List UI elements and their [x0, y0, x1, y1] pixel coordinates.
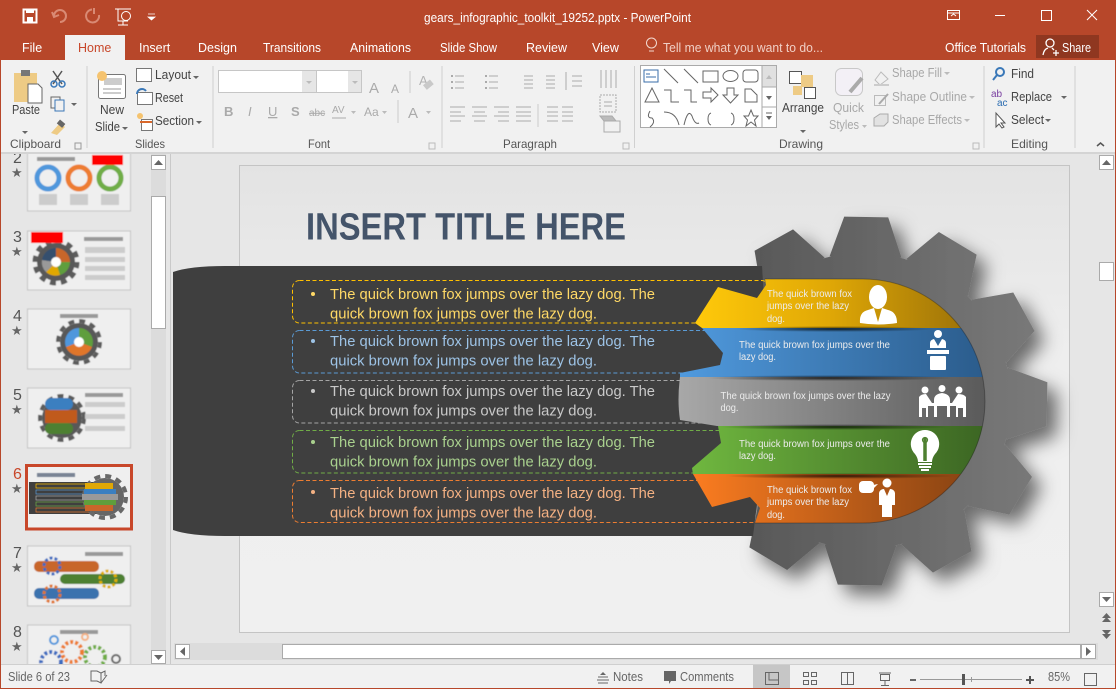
band: grey: The quick brown fox jumps over the lazy	[720, 391, 890, 402]
band: blue: The quick brown fox jumps over the	[739, 340, 890, 351]
title bar	[0, 0, 1116, 60]
group: shape format buttons: Shape Outline	[892, 90, 967, 104]
text box: yellow item: The quick brown fox jumps over the lazy dog. The	[330, 286, 655, 303]
group: font: abc	[309, 108, 325, 119]
text box: blue item: The quick brown fox jumps over the lazy dog. The	[330, 333, 655, 350]
ribbon tabs: Home	[78, 41, 111, 55]
slide numbers: 7	[13, 545, 22, 562]
group: font: S	[291, 104, 300, 119]
group: arrange	[782, 72, 824, 133]
band: green	[692, 424, 983, 474]
slide numbers: ★	[11, 560, 23, 575]
group: editing: Select	[1011, 113, 1044, 127]
ribbon tabs: Slide Show	[440, 41, 498, 55]
slide numbers: ★	[11, 402, 23, 417]
band: orange: The quick brown fox	[767, 485, 852, 496]
group: drawing shape gallery	[640, 65, 776, 128]
group: clipboard	[10, 70, 81, 151]
icon: redo	[86, 8, 99, 22]
slide numbers: ★	[11, 639, 23, 654]
group: font: B	[224, 104, 233, 119]
text box: yellow item	[292, 280, 768, 323]
band: orange	[693, 473, 961, 523]
ribbon tabs: Review	[526, 41, 568, 55]
icon: slideshow from start	[115, 9, 131, 25]
icon: speaker at podium	[927, 330, 949, 370]
group: font: Aa	[364, 105, 379, 119]
ribbon tabs	[22, 35, 1099, 60]
status bar	[0, 664, 1116, 689]
window controls	[947, 10, 1097, 20]
group: font	[218, 70, 435, 151]
group: editing	[991, 67, 1104, 151]
text box: green item	[292, 430, 768, 473]
slide numbers: 4	[13, 308, 22, 325]
group: slides: Section	[155, 114, 194, 128]
bottom horizontal scrollbar	[174, 643, 1098, 660]
thumbnail scrollbar	[151, 154, 166, 665]
gear	[749, 214, 1070, 608]
group: shape format buttons: Shape Fill	[892, 66, 942, 80]
group: font: A	[369, 80, 379, 97]
band: yellow: The quick brown fox	[767, 289, 852, 300]
group: slides: Slides	[135, 137, 165, 151]
group: slides: Reset	[155, 91, 183, 105]
text box: blue item: quick brown fox jumps over the lazy dog.	[330, 352, 597, 370]
group: slides: Layout	[155, 68, 192, 82]
group: slides: New	[100, 103, 125, 117]
text box: orange item	[292, 480, 768, 522]
group: quick styles: Styles	[829, 118, 859, 132]
group: editing: ab	[991, 89, 1003, 100]
ribbon tabs: File	[22, 41, 42, 55]
ribbon tabs: Animations	[350, 41, 411, 55]
slide numbers: ★	[11, 244, 23, 259]
slide numbers	[11, 150, 23, 654]
band: orange: jumps over the lazy	[766, 497, 849, 508]
text box: orange item: The quick brown fox jumps over the lazy dog. The	[330, 485, 655, 502]
group: font: I	[248, 104, 252, 119]
text box: grey item: The quick brown fox jumps over the lazy dog. The	[330, 383, 655, 400]
group: quick styles	[829, 68, 867, 132]
icon: save	[24, 9, 36, 22]
icon: undo	[52, 10, 66, 22]
band: orange: dog.	[767, 510, 785, 521]
thumbnail: slide 7	[28, 546, 130, 606]
group: arrange: Arrange	[782, 101, 824, 115]
slide numbers: 8	[13, 624, 22, 641]
ribbon tabs: Insert	[139, 41, 171, 55]
band: yellow	[695, 279, 961, 328]
icon: customize menu	[148, 14, 155, 20]
text box: grey item	[292, 380, 768, 423]
panel: slide thumbnails sidebar	[1, 148, 171, 685]
ribbon tabs: Tell me what you want to do...	[663, 41, 823, 55]
slide numbers: 5	[13, 387, 22, 404]
slide numbers: ★	[11, 481, 23, 496]
status bar: 85%	[1048, 670, 1070, 684]
group: editing: ac	[997, 98, 1008, 109]
ribbon tabs: Transitions	[263, 41, 321, 55]
status bar: Slide 6 of 23	[8, 670, 70, 684]
band: yellow: dog.	[767, 314, 785, 325]
status bar: Notes	[613, 670, 643, 684]
group: quick styles: Quick	[833, 101, 865, 115]
band: blue: lazy dog.	[739, 352, 776, 363]
thumbnail: slide 2	[28, 148, 130, 211]
label: paragraph group: Paragraph	[503, 137, 557, 151]
slide numbers: 2	[13, 150, 22, 167]
ribbon tabs: Office Tutorials	[945, 41, 1026, 55]
slide numbers: 3	[13, 229, 22, 246]
group: clipboard: Clipboard	[10, 137, 61, 151]
thumbnail: slide 3	[28, 231, 130, 290]
ribbon tabs: View	[592, 41, 620, 55]
group: font: A	[419, 73, 428, 88]
group: font: A	[391, 82, 399, 96]
thumbnail: slide 5	[28, 388, 130, 448]
icon: light bulb	[911, 430, 939, 471]
band: green: lazy dog.	[739, 451, 776, 462]
group: editing: Find	[1011, 67, 1034, 81]
title: INSERT TITLE HERE	[306, 206, 626, 248]
group: font: AV	[332, 105, 345, 116]
group: slides: Slide	[95, 120, 120, 134]
group: paragraph	[450, 70, 620, 132]
group: font: Font	[308, 137, 331, 151]
text box: yellow item: quick brown fox jumps over the lazy dog.	[330, 306, 597, 322]
status bar: Comments	[680, 670, 734, 684]
thumbnail: slide 8	[28, 625, 130, 685]
dark horizontal banner	[173, 266, 770, 536]
document title: gears_infographic_toolkit_19252.pptx - PowerPoint	[424, 11, 691, 25]
band: yellow: jumps over the lazy	[766, 301, 849, 312]
group: slides	[95, 68, 202, 151]
text box: green item: quick brown fox jumps over the lazy dog.	[330, 454, 597, 470]
icon: businessman	[860, 285, 897, 324]
text box: blue item	[292, 330, 768, 373]
band: grey: dog.	[720, 403, 738, 414]
text box: grey item: quick brown fox jumps over the lazy dog.	[330, 402, 597, 420]
text box: orange item: quick brown fox jumps over the lazy dog.	[330, 504, 597, 522]
icon: meeting table	[919, 385, 966, 417]
slide numbers: ★	[11, 165, 23, 180]
band: grey	[678, 375, 985, 426]
group: clipboard: Paste	[12, 103, 40, 117]
group: shape format buttons: Shape Effects	[892, 113, 962, 127]
ribbon tabs: Share	[1062, 41, 1091, 55]
ribbon	[0, 60, 1116, 154]
band: blue	[680, 326, 983, 377]
thumbnail: slide 4	[28, 309, 130, 369]
text box: green item: The quick brown fox jumps over the lazy dog. The	[330, 434, 655, 451]
group separators	[87, 66, 1075, 148]
group: editing: Replace	[1011, 90, 1052, 104]
slide numbers: 6	[13, 466, 22, 483]
group: editing: Editing	[1011, 137, 1048, 151]
panel: slide canvas	[173, 166, 1070, 632]
right vertical scrollbar	[1098, 154, 1115, 644]
group: shape format buttons	[779, 66, 979, 151]
group: font: U	[268, 104, 277, 119]
icon: presenter with speech bubble	[859, 478, 895, 517]
group: shape format buttons: Drawing	[779, 137, 823, 151]
group: font: A	[408, 105, 418, 122]
ribbon tabs: Design	[198, 41, 237, 55]
thumbnail: slide 6 selected	[26, 466, 132, 529]
band: green: The quick brown fox jumps over the	[739, 439, 890, 450]
slide numbers: ★	[11, 323, 23, 338]
